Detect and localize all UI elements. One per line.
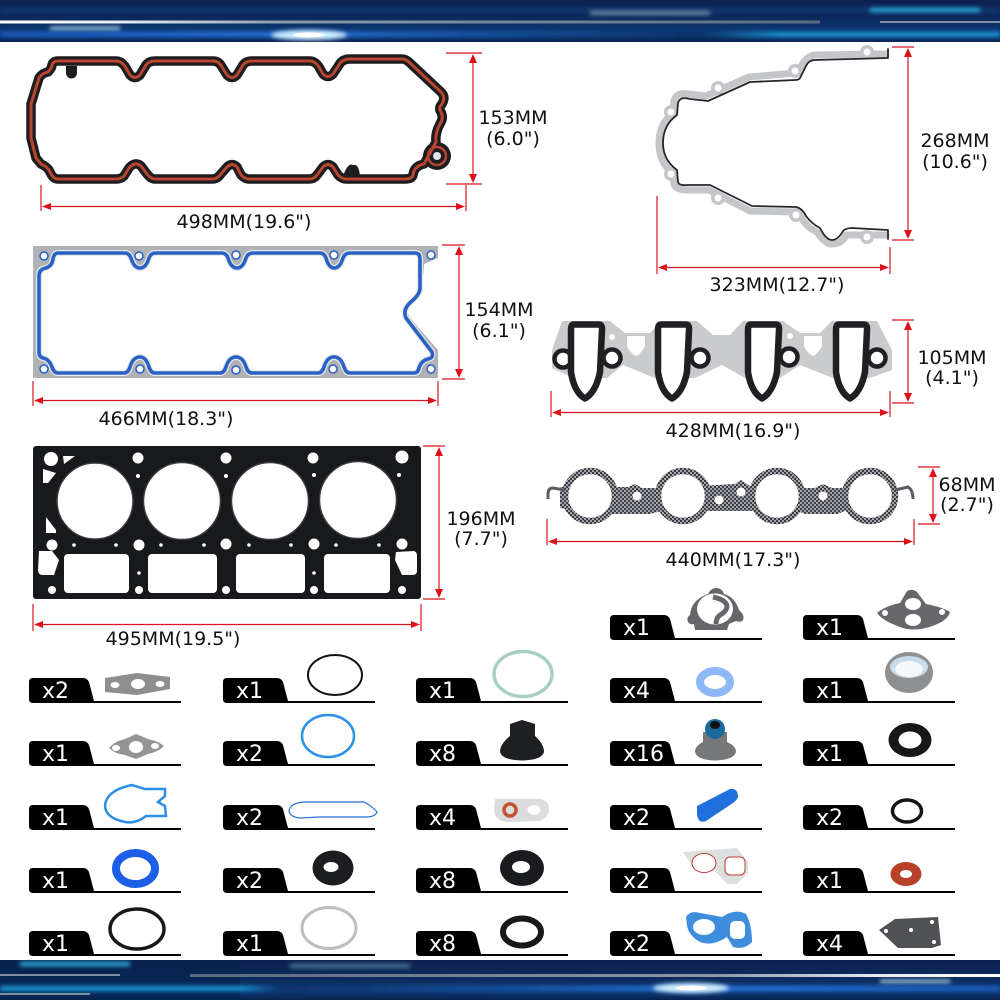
parts row: column 2 item 2: [223, 715, 375, 767]
parts row: column 5 item 5: x4: [816, 932, 843, 957]
parts row: column 4 item 5: x2: [623, 932, 650, 957]
parts row: column 5 item 2: [803, 723, 955, 767]
parts row: column 3 item 3: x4: [429, 806, 456, 831]
parts row: column 5 item 5: [803, 917, 955, 957]
parts row: column 4 item 3: [610, 789, 762, 831]
dimension: valley cover gasket: 466MM(18.3"): [99, 408, 233, 430]
gasket: black and red valve cover gasket: [31, 59, 451, 179]
parts row: column 4 item 0: [610, 588, 762, 641]
dimension: exhaust manifold gasket: 440MM(17.3"): [666, 549, 800, 571]
parts row: column 2 item 4: x2: [236, 869, 263, 894]
parts row: column 4 item 1: [610, 671, 762, 704]
dimension: valve cover gasket: (6.0"): [486, 128, 540, 150]
parts row: column 2 item 4: [223, 850, 375, 894]
parts row: column 4 item 2: x16: [623, 742, 664, 767]
dimension: valve cover gasket: [41, 53, 548, 233]
parts row: column 3 item 4: [416, 850, 568, 894]
dimension: valley cover gasket: (6.1"): [472, 320, 526, 342]
parts row: column 5 item 3: [803, 800, 955, 831]
parts row: column 3 item 3: [416, 799, 568, 831]
parts row: column 4 item 3: x2: [623, 806, 650, 831]
parts row: column 1 item 2: [29, 734, 181, 767]
parts row: column 3 item 2: [416, 720, 568, 767]
parts row: column 5 item 3: x2: [816, 806, 843, 831]
gasket: intake manifold gasket: [552, 321, 892, 398]
dimension: exhaust manifold gasket: 68MM: [939, 474, 995, 496]
gasket: silver and black timing cover gasket: [659, 45, 888, 244]
dimension: exhaust manifold gasket: (2.7"): [940, 494, 994, 516]
parts row: column 3 item 1: x1: [429, 679, 456, 704]
parts row: column 2 item 2: x2: [236, 742, 263, 767]
parts row: column 2 item 3: x2: [236, 806, 263, 831]
dimension: timing cover gasket: 268MM: [920, 130, 990, 152]
parts row: column 4 item 4: [610, 848, 762, 894]
parts row: column 5 item 0: [803, 590, 955, 641]
parts row: column 1 item 4: x1: [42, 869, 69, 894]
dimension: valley cover gasket: 154MM: [464, 299, 534, 321]
parts row: column 4 item 4: x2: [623, 869, 650, 894]
parts row: column 1 item 5: [29, 909, 181, 957]
bottom banner: [0, 960, 1000, 1000]
parts row: column 4 item 5: [610, 912, 762, 957]
parts row: column 1 item 3: x1: [42, 806, 69, 831]
dimension: timing cover gasket: 323MM(12.7"): [710, 274, 844, 296]
parts row: column 3 item 2: x8: [429, 742, 456, 767]
parts row: column 5 item 4: [803, 862, 955, 894]
parts row: column 2 item 5: x1: [236, 932, 263, 957]
parts row: column 1 item 1: [29, 673, 181, 704]
dimension: valley cover gasket: [33, 245, 534, 430]
parts row: column 5 item 4: x1: [816, 869, 843, 894]
parts row: column 1 item 1: x2: [42, 679, 69, 704]
parts row: column 2 item 3: [223, 802, 377, 831]
dimension: exhaust manifold gasket: [547, 467, 995, 571]
parts row: column 4 item 0: x1: [623, 616, 650, 641]
parts row: column 3 item 5: [416, 918, 568, 957]
dimension: timing cover gasket: [657, 47, 990, 296]
dimension: cylinder head gasket: 495MM(19.5"): [106, 628, 240, 650]
dimension: intake manifold gasket: (4.1"): [925, 367, 979, 389]
dimension: timing cover gasket: (10.6"): [922, 151, 988, 173]
parts row: column 1 item 5: x1: [42, 932, 69, 957]
parts row: column 2 item 1: x1: [236, 679, 263, 704]
top banner: [0, 0, 1000, 42]
dimension: cylinder head gasket: (7.7"): [454, 528, 508, 550]
gasket: exhaust manifold gasket: [548, 471, 913, 521]
gasket: blue and silver valley cover gasket: [33, 246, 438, 378]
parts row: column 1 item 4: [29, 853, 181, 894]
dimension: cylinder head gasket: 196MM: [446, 508, 516, 530]
parts row: column 3 item 4: x8: [429, 869, 456, 894]
parts row: column 5 item 1: [803, 652, 955, 704]
parts row: column 1 item 3: [29, 785, 181, 831]
parts row: column 3 item 5: x8: [429, 932, 456, 957]
dimension: cylinder head gasket: [33, 446, 516, 650]
gasket: black cylinder head gasket: [33, 446, 421, 599]
parts row: column 5 item 1: x1: [816, 679, 843, 704]
parts row: column 4 item 2: [610, 719, 762, 767]
parts row: column 1 item 2: x1: [42, 742, 69, 767]
dimension: valve cover gasket: 498MM(19.6"): [177, 211, 311, 233]
parts row: column 4 item 1: x4: [623, 679, 650, 704]
dimension: intake manifold gasket: 105MM: [917, 347, 987, 369]
parts row: column 5 item 0: x1: [816, 616, 843, 641]
parts row: column 2 item 5: [223, 908, 375, 957]
parts row: column 2 item 1: [223, 655, 375, 704]
parts row: column 3 item 1: [416, 652, 568, 704]
parts row: column 5 item 2: x1: [816, 742, 843, 767]
dimension: valve cover gasket: 153MM: [478, 107, 548, 129]
dimension: intake manifold gasket: [551, 320, 987, 442]
dimension: intake manifold gasket: 428MM(16.9"): [666, 420, 800, 442]
